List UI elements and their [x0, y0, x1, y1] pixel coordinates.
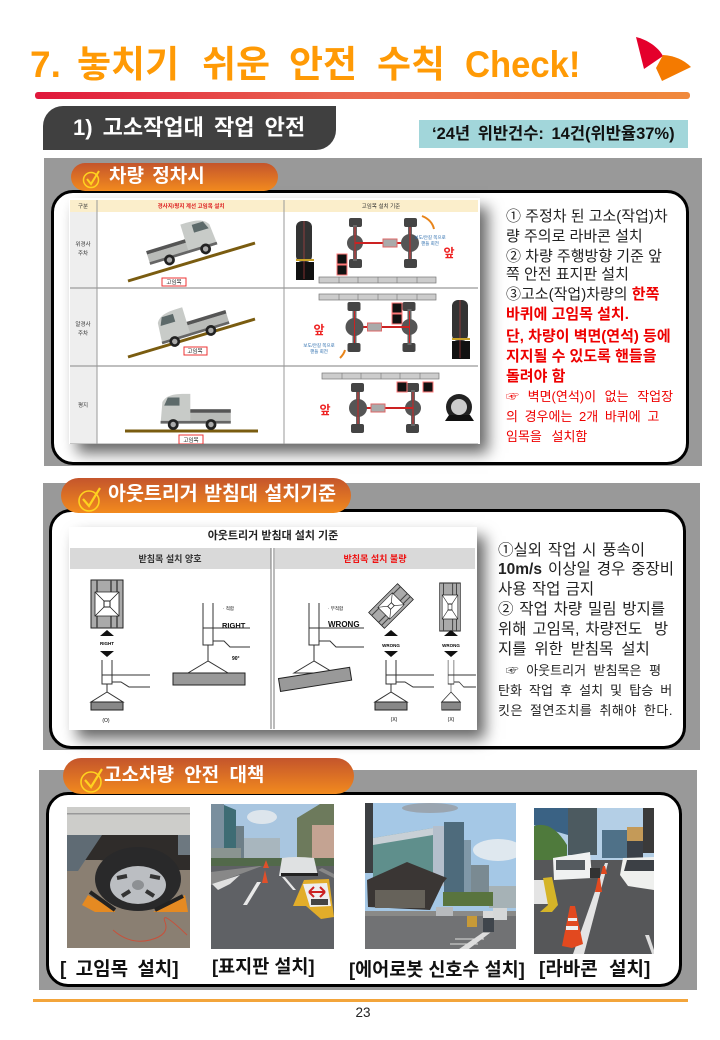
title: 수칙 — [377, 44, 445, 85]
section heading: 1) 고소작업대 작업 안전 — [73, 115, 305, 140]
title: 7. — [30, 44, 61, 85]
violation count badge — [419, 120, 688, 148]
image: chock table: 경사지/평지 계선 고임목 설치 — [158, 202, 224, 210]
text: parking instructions — [506, 208, 673, 444]
text: parking instructions: 쪽 안전 표지판 설치 — [506, 266, 629, 283]
pill heading — [61, 478, 351, 513]
section heading — [43, 106, 336, 150]
text: outrigger instructions: 사용 작업 금지 — [498, 581, 594, 598]
image: chock table: 고임목 — [187, 347, 203, 355]
photo: wheel chock — [67, 807, 190, 948]
text: outrigger instructions: 킷은 절연조치를 취해야 한다. — [498, 703, 673, 718]
icon: check — [78, 488, 101, 512]
text: parking instructions: 임목을 설치함 — [506, 429, 587, 444]
text: parking instructions: ③고소(작업)차량의 한쪽 — [506, 286, 659, 303]
title underline bar — [35, 92, 690, 99]
image: outrigger standard: (O) — [102, 718, 110, 724]
text: outrigger instructions: 지를 위한 받침목 설치 — [498, 641, 650, 658]
image: chock table: 평지 — [78, 401, 88, 409]
image: chock table: 앞 — [443, 246, 455, 260]
panel card — [46, 792, 682, 987]
image: outrigger standard: 90° — [232, 656, 240, 662]
image: outrigger standard: (X) — [448, 717, 455, 723]
image: chock table — [69, 198, 480, 444]
text: parking instructions: 지지될 수 있도록 핸들을 — [506, 348, 657, 365]
text: outrigger instructions: ☞ 아웃트리거 받침목은 평 — [506, 663, 661, 678]
image: outrigger standard: 받침목 설치 불량 — [344, 553, 407, 564]
image: outrigger standard: WRONG — [382, 643, 400, 648]
captions: [라바콘 설치] — [539, 959, 650, 980]
image: chock table: 고임목 설치 기준 — [362, 202, 400, 210]
pill heading — [71, 163, 278, 191]
image: chock table: 주차 — [78, 249, 88, 257]
image: chock table: 위경사 — [75, 240, 91, 248]
captions — [60, 956, 650, 980]
image: outrigger standard: 받침목 설치 양호 — [139, 553, 201, 564]
image: chock table: 앞 — [319, 403, 331, 417]
icon: check — [80, 768, 103, 793]
image: chock table: 고임목 — [166, 278, 182, 286]
text: parking instructions: 량 주의로 라바콘 설치 — [506, 228, 643, 245]
photo: traffic cones — [534, 808, 654, 954]
captions: [표지판 설치] — [212, 956, 315, 977]
panel: high-lift vehicle safety — [39, 770, 697, 990]
image: chock table: 보도/안길 쪽으로 — [303, 342, 335, 349]
image: outrigger standard: RIGHT — [222, 621, 246, 630]
icon: check — [82, 170, 100, 188]
photo: warning sign — [211, 804, 334, 949]
image: chock table: 핸들 회전 — [310, 348, 328, 355]
footer line — [33, 999, 688, 1002]
text: parking instructions: ☞ 벽면(연석)이 없는 작업장 — [506, 389, 673, 404]
pill text: 고소차량 안전 대책 — [104, 765, 264, 786]
panel card — [49, 509, 686, 749]
panel: vehicle parking — [44, 158, 702, 466]
panel: outrigger support — [43, 483, 700, 750]
image: outrigger standard: WRONG — [328, 620, 360, 629]
image: outrigger standard: (X) — [391, 717, 398, 723]
text: outrigger instructions: 위해 고임목, 차량전도 방 — [498, 621, 668, 638]
photo: air robot signaller — [365, 803, 516, 949]
pill text: 차량 정차시 — [109, 166, 205, 187]
text: parking instructions: ② 차량 주행방향 기준 앞 — [506, 248, 662, 265]
image: outrigger standard — [69, 527, 477, 730]
image: outrigger standard: · 적합 — [223, 605, 234, 612]
text: parking instructions: 바퀴에 고임목 설치. — [506, 306, 629, 323]
image: outrigger standard: 아웃트리거 받침대 설치 기준 — [208, 528, 338, 542]
text: outrigger instructions: 10m/s 이상일 경우 중장비 — [498, 561, 674, 578]
image: chock table: 알경사 — [75, 320, 91, 328]
title: Check! — [465, 44, 580, 85]
page number: 23 — [355, 1005, 371, 1020]
captions: [ 고임목 설치] — [60, 959, 179, 980]
image: chock table: 보도/안길 쪽으로 — [414, 234, 446, 241]
title: 놓치기 — [77, 44, 179, 85]
text: outrigger instructions — [498, 542, 674, 718]
text: parking instructions: 의 경우에는 2개 바퀴에 고 — [506, 409, 659, 424]
violation count badge: ‘24년 위반건수: 14건(위반율37%) — [432, 125, 675, 143]
title: 안전 — [289, 44, 357, 85]
text: parking instructions: 단, 차량이 벽면(연석) 등에 — [506, 328, 671, 345]
panel card — [51, 190, 689, 465]
pill heading — [63, 758, 354, 794]
image: outrigger standard: WRONG — [442, 643, 460, 648]
title — [30, 44, 580, 85]
title: 쉬운 — [202, 44, 270, 85]
image: outrigger standard: RIGHT — [100, 641, 114, 646]
image: chock table: 구분 — [78, 203, 88, 210]
image: chock table: 주차 — [78, 329, 88, 337]
icon: SK logo — [636, 37, 691, 81]
text: outrigger instructions: ② 작업 차량 밀림 방지를 — [498, 601, 665, 618]
image: chock table: 앞 — [313, 323, 325, 337]
image: chock table: 핸들 회전 — [421, 240, 439, 247]
image: outrigger standard: · 부적합 — [328, 605, 343, 612]
captions: [에어로봇 신호수 설치] — [349, 959, 525, 980]
text: parking instructions: 돌려야 함 — [506, 368, 565, 385]
image: chock table: 고임목 — [183, 436, 199, 444]
text: outrigger instructions: 탄화 작업 후 설치 및 탑승 버 — [498, 683, 672, 698]
text: outrigger instructions: ①실외 작업 시 풍속이 — [498, 542, 645, 559]
pill text: 아웃트리거 받침대 설치기준 — [108, 483, 336, 505]
text: parking instructions: ① 주정차 된 고소(작업)차 — [506, 208, 668, 225]
